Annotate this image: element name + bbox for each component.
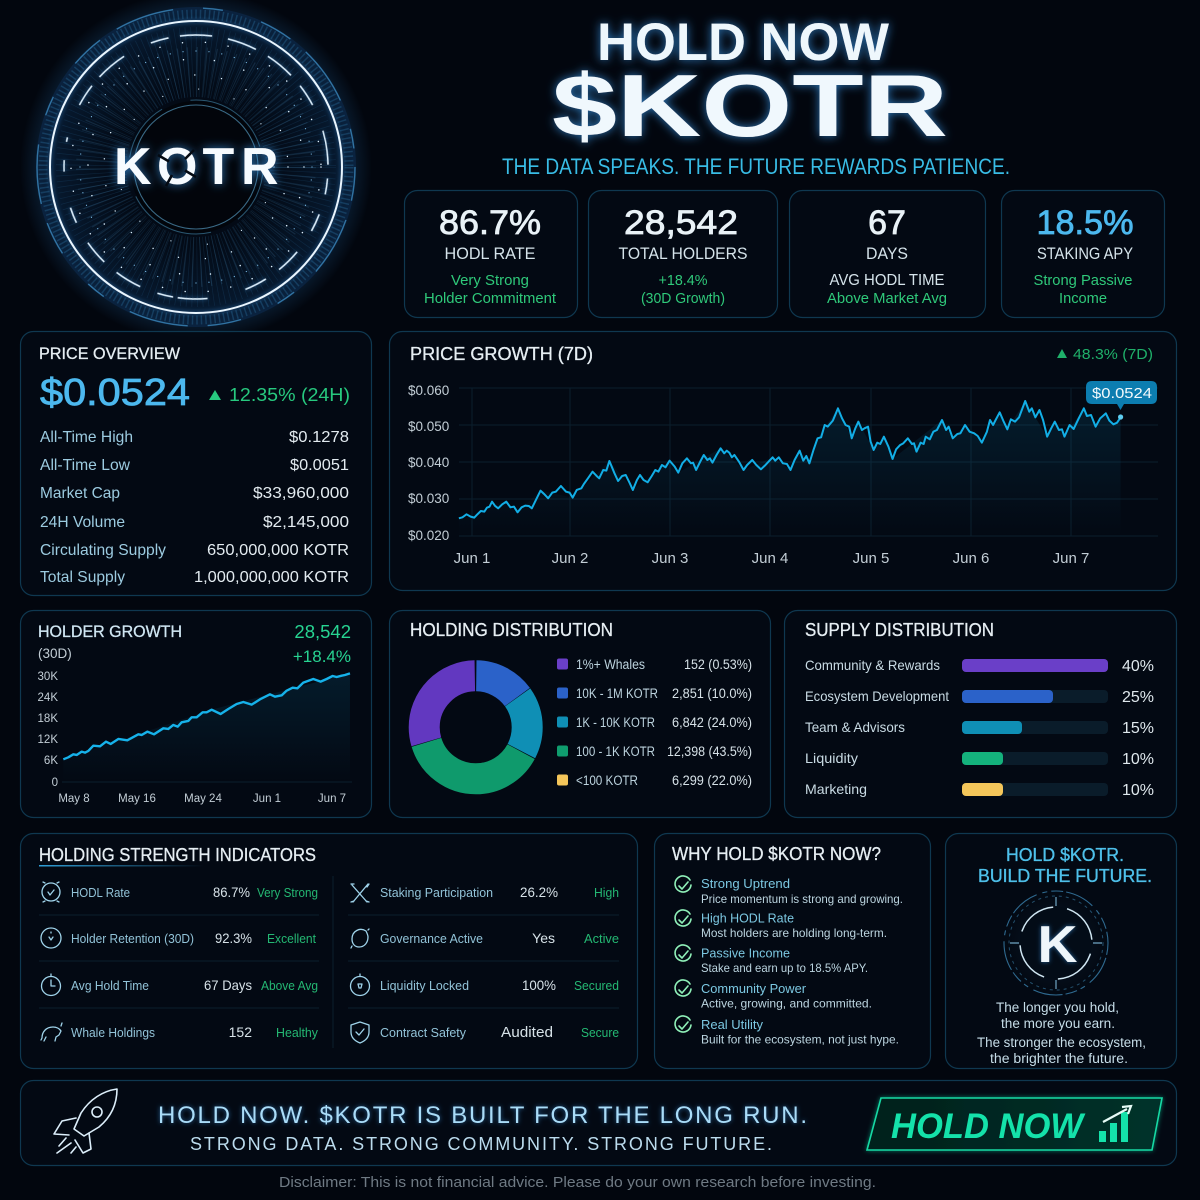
- y axis labels: 30K: [38, 671, 58, 683]
- donut legend: 1%+ Whales: [576, 657, 645, 672]
- row: liquidity locked: [350, 974, 619, 996]
- donut legend: 6,299 (22.0%): [672, 773, 752, 788]
- message: more you earn: the more you earn.: [1001, 1016, 1115, 1031]
- stat card: staking APY: 18.5%: [1036, 204, 1134, 242]
- reason: passive income: Passive Income: [701, 946, 790, 960]
- x axis labels: Jun 7: [1053, 550, 1089, 567]
- supply row: marketing: 10%: [1122, 782, 1154, 799]
- x axis labels: Jun 1: [253, 793, 281, 805]
- y axis labels: $0.020: [408, 528, 449, 543]
- y axis labels: 12K: [38, 734, 58, 746]
- stat card: total holders: +18.4%: [658, 272, 708, 289]
- donut legend: 12,398 (43.5%): [667, 744, 752, 759]
- row: contract safety: Contract Safety: [380, 1026, 467, 1040]
- row: staking participation: Staking Participation: [380, 886, 493, 900]
- panel: holder growth: [20, 610, 372, 818]
- icon: K emblem: [998, 885, 1114, 1001]
- supply row: community: Community & Rewards: [805, 657, 940, 673]
- donut chart: [424, 676, 527, 779]
- donut legend: [557, 657, 752, 788]
- stat card: HODL rate: Holder Commitment: [424, 290, 557, 307]
- holder change: +18.4%: [293, 647, 351, 666]
- panel: holding strength indicators: [20, 834, 638, 1068]
- icon: rocket: [54, 1089, 117, 1153]
- heading: holder growth: HOLDER GROWTH: [38, 622, 182, 641]
- supply row: team: 15%: [1122, 720, 1154, 737]
- panel: why hold: [654, 834, 930, 1068]
- period label: (30D): [38, 646, 72, 661]
- price line: [459, 401, 1121, 536]
- stat card: total holders: [588, 190, 778, 318]
- donut legend: 1K - 10K KOTR: [576, 715, 655, 730]
- x axis labels: Jun 4: [752, 550, 788, 567]
- supply row: liquidity: 10%: [1122, 751, 1154, 768]
- reason: real utility: Built for the ecosystem, not just hype.: [701, 1032, 899, 1046]
- row: governance active: Yes: [532, 930, 555, 946]
- price stats table: All-Time High: [40, 429, 133, 446]
- stat card: average hold days: [790, 190, 986, 318]
- message: brighter future: the brighter the future.: [990, 1051, 1128, 1066]
- message: longer you hold: The longer you hold,: [996, 1000, 1119, 1015]
- icon: K emblem: K: [1038, 916, 1078, 974]
- stat card: total holders: TOTAL HOLDERS: [618, 244, 748, 263]
- panel: holding distribution: [390, 610, 770, 818]
- row: holder retention: Excellent: [267, 932, 316, 946]
- y axis labels: 0: [52, 777, 58, 789]
- row: average hold time: Above Avg: [261, 979, 318, 993]
- x axis labels: [58, 793, 346, 805]
- price stats table: $0.1278: [289, 429, 349, 446]
- x axis labels: Jun 6: [953, 550, 989, 567]
- reason: high HODL rate: Most holders are holding long-term.: [701, 926, 887, 940]
- row: liquidity locked: Secured: [574, 979, 619, 993]
- x axis labels: May 24: [184, 793, 222, 805]
- y axis labels: $0.050: [408, 419, 449, 434]
- supply row: team: Team & Advisors: [805, 719, 905, 735]
- price stats table: 1,000,000,000 KOTR: [194, 569, 349, 586]
- stat card: total holders: (30D Growth): [641, 290, 725, 307]
- x axis labels: Jun 1: [454, 550, 490, 567]
- row: average hold time: Avg Hold Time: [71, 979, 149, 993]
- reason: strong uptrend: Strong Uptrend: [701, 876, 790, 891]
- banner subline: STRONG DATA. STRONG COMMUNITY. STRONG FUTURE.: [190, 1134, 772, 1154]
- logo wordmark: KOTR: [114, 138, 279, 196]
- panel: hold and build: [946, 834, 1176, 1068]
- supply row: liquidity: [805, 750, 1154, 768]
- donut legend: 6,842 (24.0%): [672, 715, 752, 730]
- y axis labels: [38, 671, 58, 789]
- supply row: ecosystem: Ecosystem Development: [805, 688, 949, 704]
- reason: strong uptrend: Price momentum is strong and growing.: [701, 892, 903, 906]
- y axis labels: $0.060: [408, 383, 449, 398]
- panel: price overview: [20, 332, 372, 596]
- stat card: total holders: 28,542: [624, 204, 738, 242]
- title: $KOTR: $KOTR: [552, 56, 948, 155]
- donut legend: 10K - 1M KOTR: [576, 686, 658, 701]
- reason: community power: [675, 980, 872, 1010]
- heading: price growth: PRICE GROWTH (7D): [410, 344, 593, 364]
- row: governance active: Active: [584, 932, 619, 946]
- supply row: marketing: Marketing: [805, 781, 867, 797]
- row: staking participation: High: [594, 886, 619, 900]
- x axis labels: Jun 2: [552, 550, 588, 567]
- disclaimer: Disclaimer: This is not financial advice. Please do your own research before investing.: [279, 1175, 876, 1191]
- y axis labels: 18K: [38, 713, 58, 725]
- holder count: 28,542: [294, 621, 351, 642]
- stat card: HODL rate: [404, 190, 578, 318]
- reason: strong uptrend: [675, 876, 903, 906]
- donut legend: 152 (0.53%): [684, 657, 752, 672]
- price stats table: 24H Volume: [40, 514, 125, 531]
- reason: high HODL rate: [675, 910, 887, 940]
- row: staking participation: [351, 884, 619, 902]
- row: whale holdings: 152: [229, 1024, 252, 1040]
- row: average hold time: 67 Days: [204, 977, 252, 993]
- row: holder retention: 92.3%: [215, 930, 252, 946]
- heading: price overview: PRICE OVERVIEW: [39, 344, 180, 363]
- row: contract safety: [351, 1022, 619, 1043]
- row: liquidity locked: 100%: [522, 977, 556, 993]
- message: stronger ecosystem: The stronger the ecosystem,: [977, 1035, 1146, 1050]
- donut legend: <100 KOTR: [576, 773, 638, 788]
- heading: hold $KOTR: HOLD $KOTR.: [1006, 845, 1124, 865]
- price stats table: Market Cap: [40, 485, 120, 502]
- row: contract safety: Audited: [501, 1024, 553, 1041]
- row: liquidity locked: Liquidity Locked: [380, 979, 469, 993]
- icon: rising bars: [1099, 1106, 1131, 1142]
- price stats table: $0.0051: [290, 457, 349, 474]
- panel: call-to-action banner: [20, 1080, 1176, 1166]
- row: HODL rate: Very Strong: [257, 886, 318, 900]
- y axis labels: $0.040: [408, 455, 449, 470]
- reason: community power: Community Power: [701, 981, 807, 996]
- price tooltip: $0.0524: [1092, 385, 1152, 402]
- heading: why hold: WHY HOLD $KOTR NOW?: [672, 844, 881, 864]
- supply row: ecosystem: 25%: [1122, 689, 1154, 706]
- x axis labels: Jun 7: [318, 793, 346, 805]
- heading: build the future: BUILD THE FUTURE.: [978, 866, 1152, 886]
- row: staking participation: 26.2%: [520, 884, 558, 900]
- current price: $0.0524: [40, 372, 190, 414]
- panel: supply distribution: [784, 610, 1176, 818]
- reason: real utility: [675, 1016, 899, 1046]
- donut legend: 2,851 (10.0%): [672, 686, 752, 701]
- supply row: team: [805, 719, 1154, 737]
- price stats table: Circulating Supply: [40, 542, 166, 559]
- row: governance active: Governance Active: [380, 932, 483, 946]
- supply row: liquidity: Liquidity: [805, 750, 858, 766]
- button: hold now: HOLD NOW: [891, 1107, 1086, 1146]
- banner headline: HOLD NOW. $KOTR IS BUILT FOR THE LONG RUN.: [158, 1102, 807, 1129]
- tagline: THE DATA SPEAKS. THE FUTURE REWARDS PATIENCE.: [502, 154, 1010, 179]
- stat card: average hold days: AVG HODL TIME: [830, 272, 944, 289]
- row: whale holdings: Whale Holdings: [71, 1026, 155, 1040]
- stat card: average hold days: 67: [868, 204, 906, 242]
- row: HODL rate: 86.7%: [213, 884, 250, 900]
- heading: supply distribution: SUPPLY DISTRIBUTION: [805, 620, 994, 640]
- 7d change: 48.3% (7D): [1073, 346, 1153, 363]
- heading: holding distribution: HOLDING DISTRIBUTION: [410, 620, 613, 640]
- button: hold now: [867, 1098, 1162, 1150]
- x axis labels: May 16: [118, 793, 156, 805]
- 24h change: 12.35% (24H): [229, 385, 350, 405]
- price stats table: $33,960,000: [253, 485, 349, 502]
- y axis labels: [408, 383, 449, 543]
- holder line: [63, 673, 350, 782]
- stat card: HODL rate: HODL RATE: [444, 244, 536, 263]
- row: governance active: [351, 929, 619, 948]
- supply row: ecosystem: [805, 688, 1154, 706]
- stat card: staking APY: Income: [1059, 290, 1107, 307]
- stat card: staking APY: Strong Passive: [1034, 272, 1132, 289]
- price stats table: 650,000,000 KOTR: [207, 542, 349, 559]
- reason: high HODL rate: High HODL Rate: [701, 910, 794, 926]
- x axis labels: Jun 3: [652, 550, 688, 567]
- panel: price growth chart: [390, 332, 1176, 590]
- row: HODL rate: [42, 882, 318, 902]
- stat card: staking APY: [1002, 190, 1164, 318]
- stat card: average hold days: DAYS: [866, 244, 908, 263]
- title: HOLD NOW: HOLD NOW: [597, 13, 889, 72]
- stat card: HODL rate: Very Strong: [451, 272, 529, 289]
- row: HODL rate: HODL Rate: [71, 886, 130, 900]
- donut legend: 100 - 1K KOTR: [576, 744, 655, 759]
- row: average hold time: [42, 974, 318, 996]
- supply row: marketing: [805, 781, 1154, 799]
- price tooltip: [1086, 381, 1157, 420]
- reason: real utility: Real Utility: [701, 1017, 763, 1032]
- row: whale holdings: Healthy: [276, 1026, 319, 1040]
- price stats table: All-Time Low: [40, 457, 130, 474]
- x axis labels: Jun 5: [853, 550, 889, 567]
- stat card: average hold days: Above Market Avg: [827, 290, 947, 307]
- supply row: community: [805, 657, 1154, 675]
- x axis labels: May 8: [58, 793, 90, 805]
- y axis labels: 24K: [38, 692, 58, 704]
- stat card: staking APY: STAKING APY: [1037, 244, 1133, 263]
- row: holder retention: [41, 928, 316, 948]
- reason: passive income: [675, 945, 868, 975]
- price stats table: [40, 429, 349, 586]
- row: holder retention: Holder Retention (30D): [71, 932, 194, 946]
- y axis labels: $0.030: [408, 491, 449, 506]
- row: whale holdings: [41, 1023, 319, 1041]
- price stats table: $2,145,000: [263, 514, 349, 531]
- stat card: HODL rate: 86.7%: [439, 204, 541, 242]
- reason: passive income: Stake and earn up to 18.5% APY.: [701, 961, 868, 975]
- logo: KOTR circular emblem: [20, 0, 372, 343]
- x axis labels: [454, 550, 1089, 567]
- y axis labels: 6K: [44, 755, 58, 767]
- price stats table: Total Supply: [40, 569, 125, 586]
- supply row: community: 40%: [1122, 658, 1154, 675]
- reason: community power: Active, growing, and committed.: [701, 996, 872, 1010]
- row: contract safety: Secure: [581, 1026, 619, 1040]
- heading: holding strength: HOLDING STRENGTH INDICATORS: [39, 845, 316, 865]
